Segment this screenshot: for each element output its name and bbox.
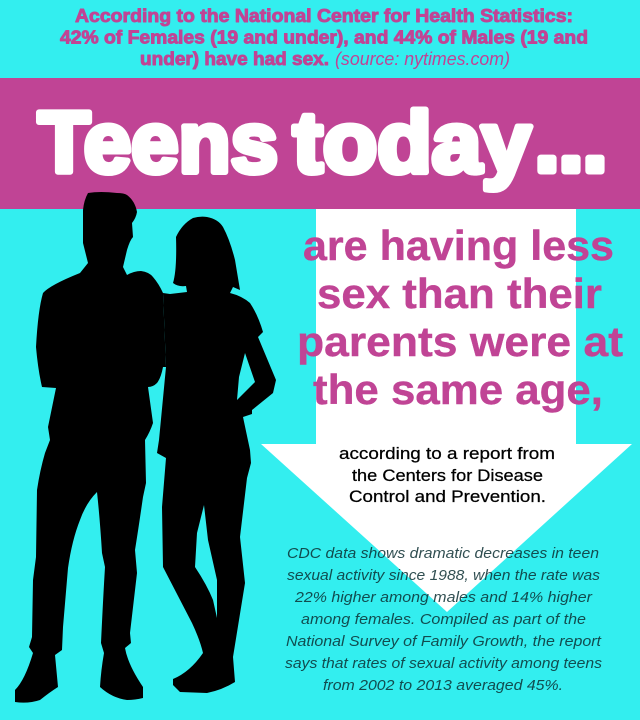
silhouette: teenage couple [15,192,276,703]
report attribution text: according to a report from [339,445,555,463]
subheading: parents were at [297,318,623,365]
subheading: the same age, [313,366,603,413]
title: Teens [38,95,278,191]
CDC data paragraph: among females. Compiled as part of the [301,611,586,628]
title: ... [535,94,607,190]
CDC data paragraph: 22% higher among males and 14% higher [294,589,593,606]
CDC data paragraph: from 2002 to 2013 averaged 45%. [323,677,563,694]
CDC data paragraph: says that rates of sexual activity among teens [285,655,603,672]
arrow: white down arrow [261,209,632,612]
CDC data paragraph: National Survey of Family Growth, the report [286,633,602,650]
report attribution text: the Centers for Disease [352,467,543,485]
subheading: are having less [303,222,614,269]
CDC data paragraph [285,545,603,694]
CDC data paragraph: CDC data shows dramatic decreases in teen [287,545,599,562]
silhouette: male figure [15,192,166,703]
intro statistic text: (source: nytimes.com) [335,49,510,69]
subheading: sex than their [317,270,602,317]
CDC data paragraph: sexual activity since 1988, when the rate was [287,567,601,584]
title banner [0,78,640,209]
title: today [293,95,531,191]
subheading [297,222,623,413]
intro statistic text: under) have had sex. [140,49,329,69]
silhouette: female figure [157,217,276,693]
report attribution text: Control and Prevention. [349,488,546,506]
report attribution text [339,445,555,506]
title [38,94,607,191]
intro statistic text: 42% of Females (19 and under), and 44% of Males (19 and [60,28,588,48]
intro statistic text [60,6,588,69]
intro statistic text: According to the National Center for Health Statistics: [75,6,573,26]
